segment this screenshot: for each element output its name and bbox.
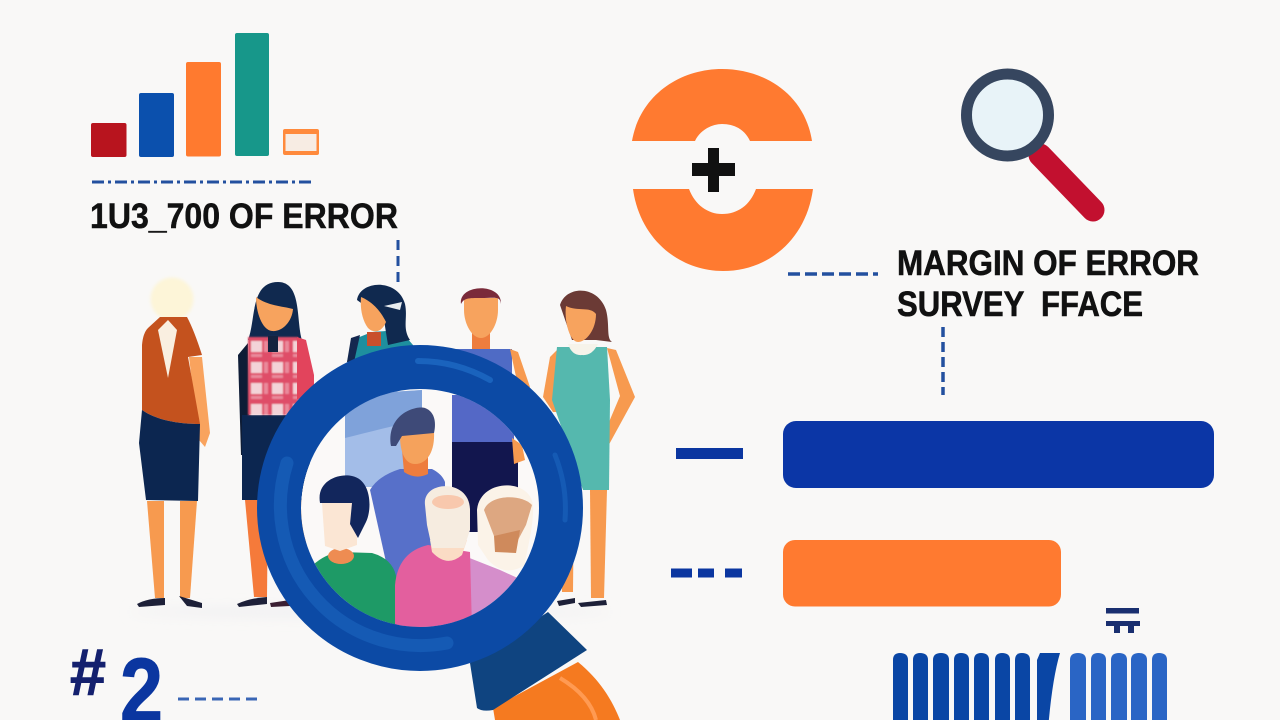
lens figure: man in blue <box>370 407 445 580</box>
icon: not-equal glyph <box>1106 608 1140 633</box>
connector: heading to bars <box>941 327 945 395</box>
person 2: long dark hair, plaid shirt <box>237 282 314 607</box>
magnifier ring <box>279 361 565 649</box>
floor shadow <box>130 607 610 617</box>
rank label <box>70 635 163 720</box>
chart dashed rule <box>92 180 315 184</box>
person 4: maroon hair, blue shirt <box>450 288 530 395</box>
blue bar <box>783 421 1214 488</box>
person 5: brown hair, teal dress <box>543 291 635 607</box>
dashed marker <box>671 568 742 578</box>
person 1: cream hair, rust shirt <box>137 278 210 608</box>
chart caption: 1U3_700 OF ERROR <box>90 197 398 236</box>
orange bar <box>783 540 1061 606</box>
lens figure: child in green <box>313 475 397 630</box>
rank label: # <box>70 635 106 709</box>
connector: badge to heading <box>788 272 878 276</box>
magnified lens view <box>301 389 539 630</box>
bar chart <box>91 33 319 157</box>
person 3: dark hair, teal top <box>347 285 413 362</box>
lens figure: person in pink <box>395 486 472 630</box>
plus symbol badge <box>632 69 813 271</box>
connector: rank label <box>178 698 262 700</box>
icon: small magnifier <box>966 74 1093 210</box>
magnifier handle <box>470 612 620 720</box>
striped bars <box>893 653 1167 720</box>
plus sign <box>692 148 735 192</box>
heading: margin of error: SURVEY FFACE <box>897 285 1143 324</box>
minus marker <box>676 448 743 459</box>
heading: margin of error: MARGIN OF ERROR <box>897 244 1199 283</box>
lens figure: lilac person <box>467 485 533 625</box>
connector: caption to people <box>396 240 400 288</box>
heading: margin of error <box>897 244 1199 324</box>
